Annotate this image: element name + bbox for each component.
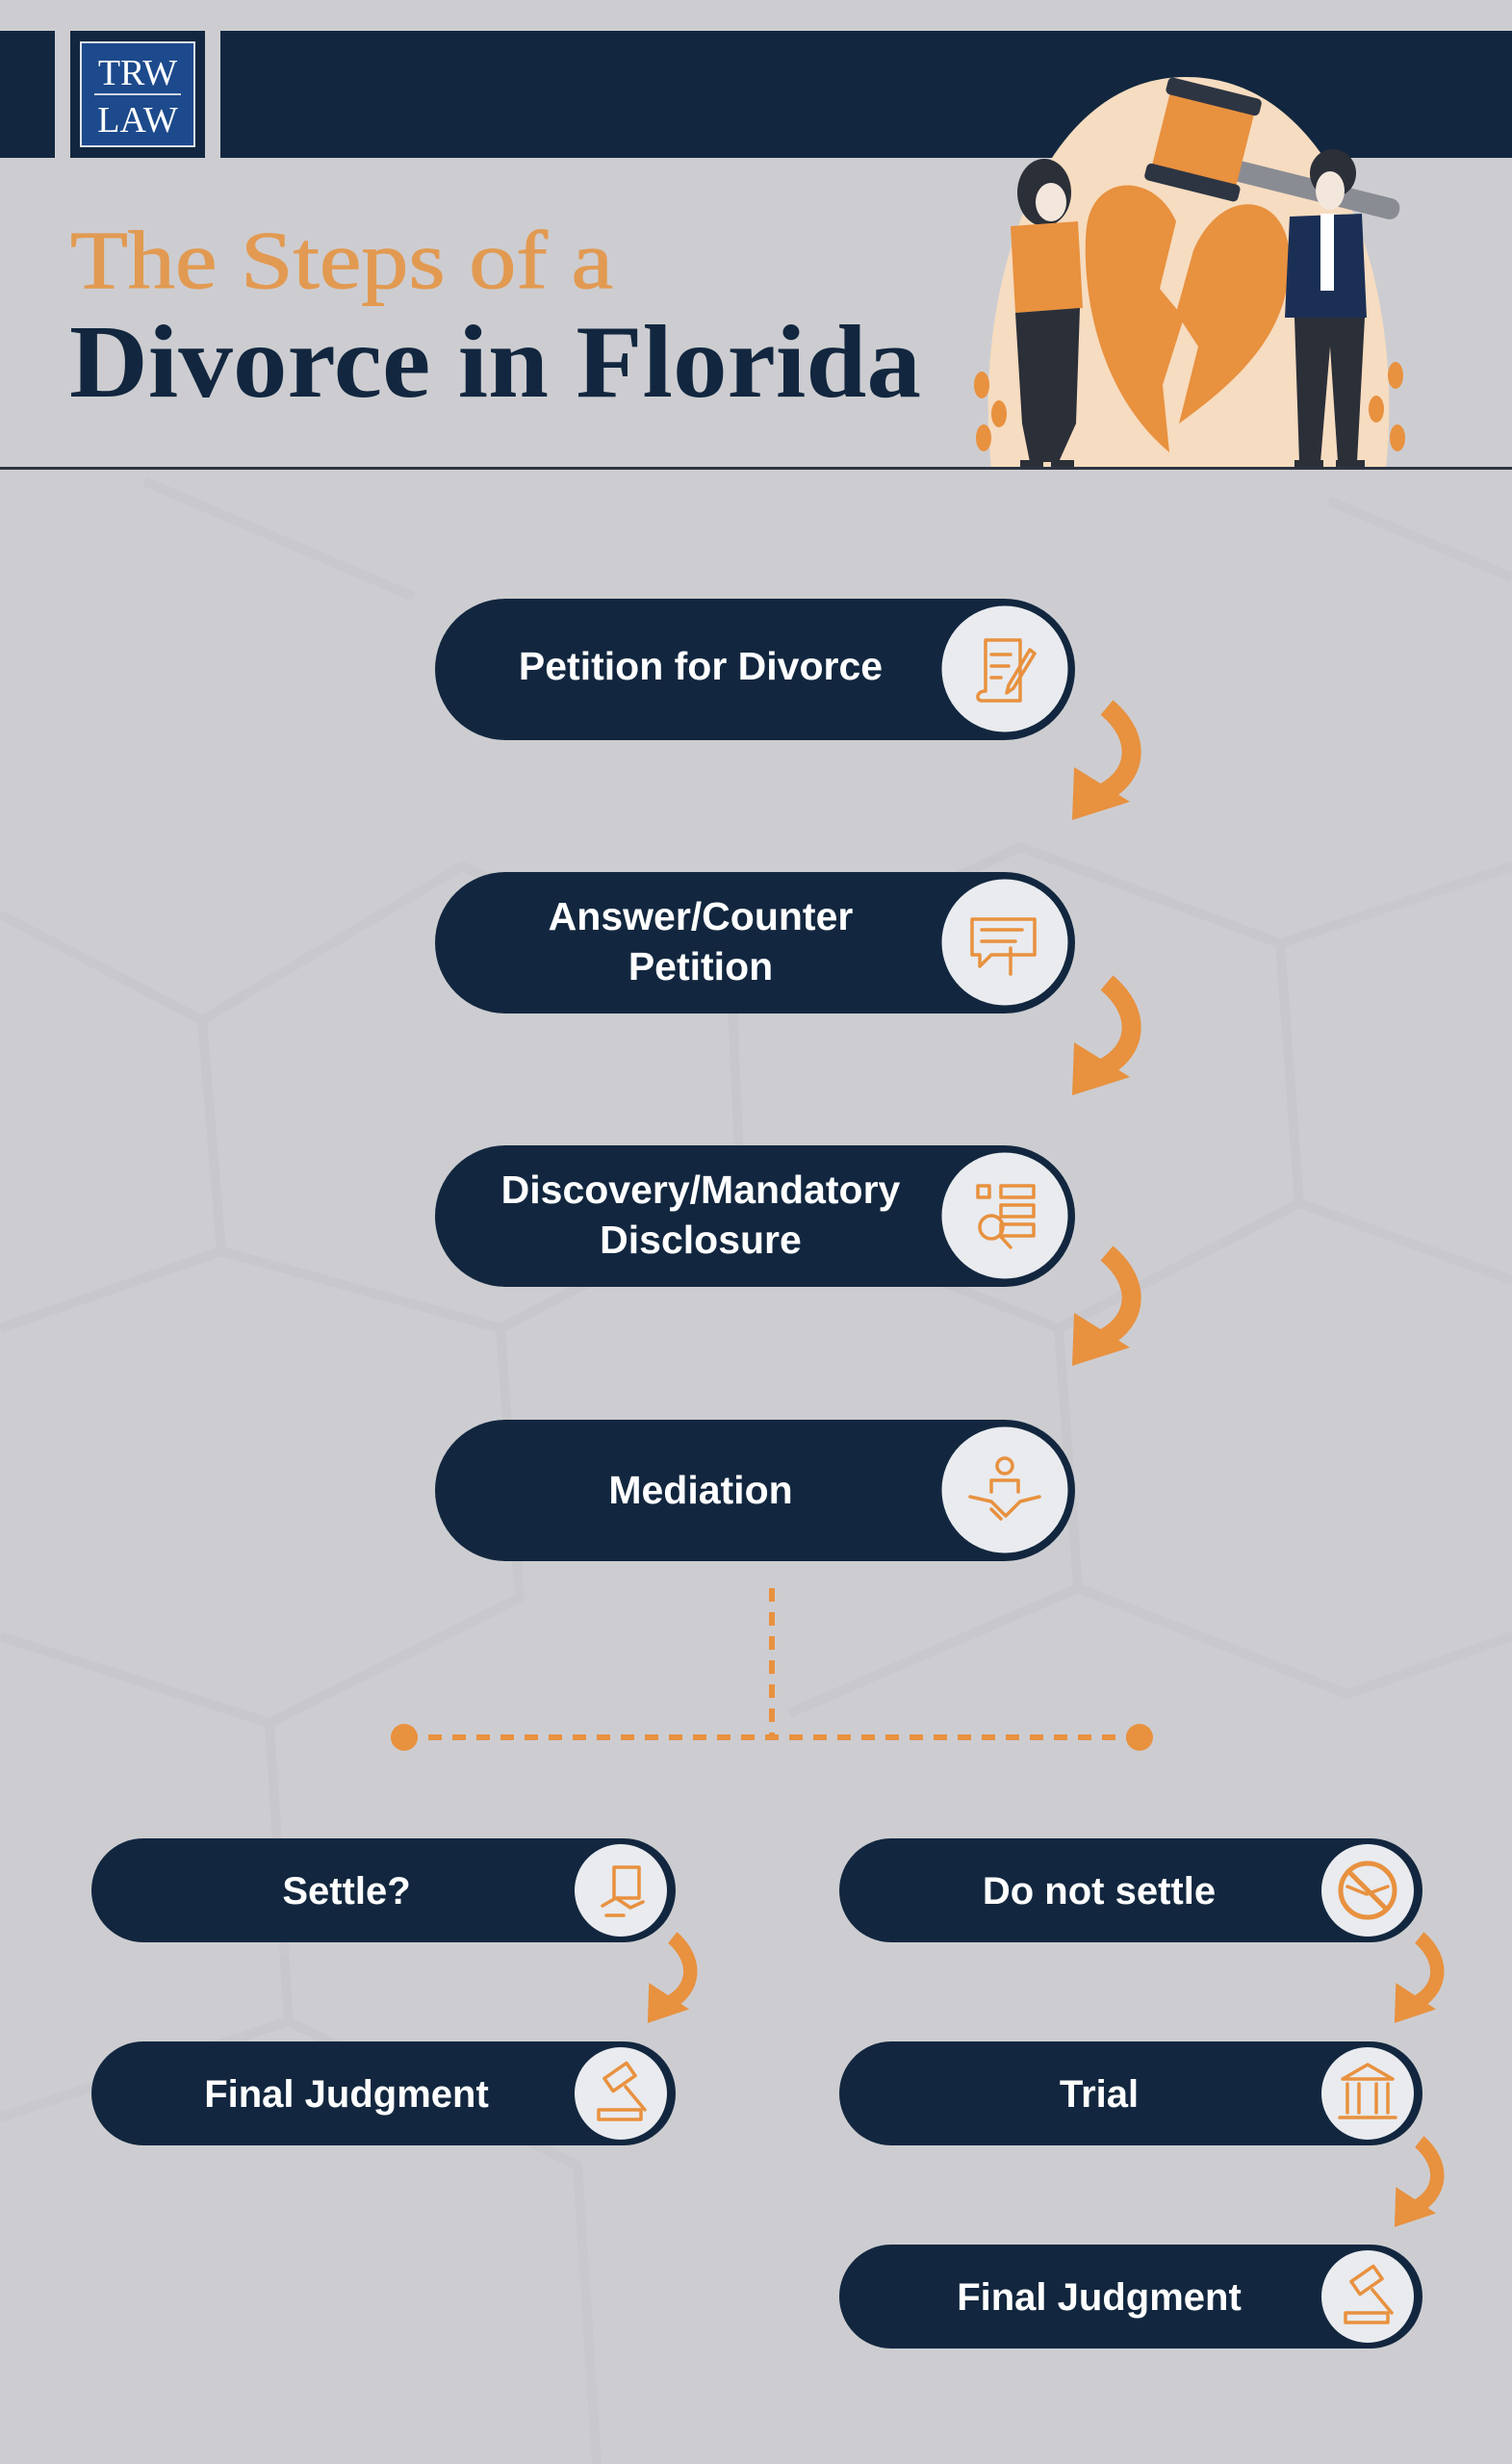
step: Do not settle: Do not settle xyxy=(983,1870,1216,1912)
logo: LAW xyxy=(97,100,178,141)
step: Settle? xyxy=(91,1838,676,1942)
step: Trial xyxy=(839,2041,1422,2145)
logo xyxy=(55,28,220,158)
arrow do not settle xyxy=(1395,1938,1437,2023)
illustration: divorcing couple with broken heart and gavel xyxy=(974,77,1405,470)
step: Final Judgment (right) xyxy=(839,2245,1422,2348)
step: Discovery/Mandatory Disclosure: Disclosure xyxy=(600,1218,802,1262)
step: Final Judgment (left): Final Judgment xyxy=(204,2073,489,2116)
step: Final Judgment (right): Final Judgment xyxy=(957,2276,1242,2319)
title xyxy=(69,214,921,420)
arrow 1 xyxy=(1072,707,1132,820)
step: Final Judgment (left) xyxy=(91,2041,676,2145)
step: Answer/Counter Petition: Petition xyxy=(628,944,773,988)
step: Trial: Trial xyxy=(1060,2073,1139,2116)
step: Mediation xyxy=(435,1420,1075,1561)
logo: TRW xyxy=(98,53,177,93)
arrow trial xyxy=(1395,2142,1437,2227)
step: Answer/Counter Petition: Answer/Counter xyxy=(549,894,853,938)
step: Settle?: Settle? xyxy=(282,1870,411,1912)
step: Discovery/Mandatory Disclosure xyxy=(435,1145,1075,1287)
step: Petition for Divorce: Petition for Divorce xyxy=(519,644,883,688)
step: Do not settle xyxy=(839,1838,1422,1942)
step: Answer/Counter Petition xyxy=(435,872,1075,1014)
step: Petition for Divorce xyxy=(435,599,1075,740)
title: Divorce in Florida xyxy=(69,305,921,420)
arrow 2 xyxy=(1072,983,1132,1095)
step: Discovery/Mandatory Disclosure: Discovery/Mandatory xyxy=(501,1168,901,1212)
arrow 3 xyxy=(1072,1253,1132,1366)
step: Mediation: Mediation xyxy=(608,1468,793,1512)
header bar xyxy=(0,31,1512,158)
title: The Steps of a xyxy=(70,214,613,306)
arrow settle xyxy=(648,1938,690,2023)
branch connector xyxy=(391,1588,1153,1751)
